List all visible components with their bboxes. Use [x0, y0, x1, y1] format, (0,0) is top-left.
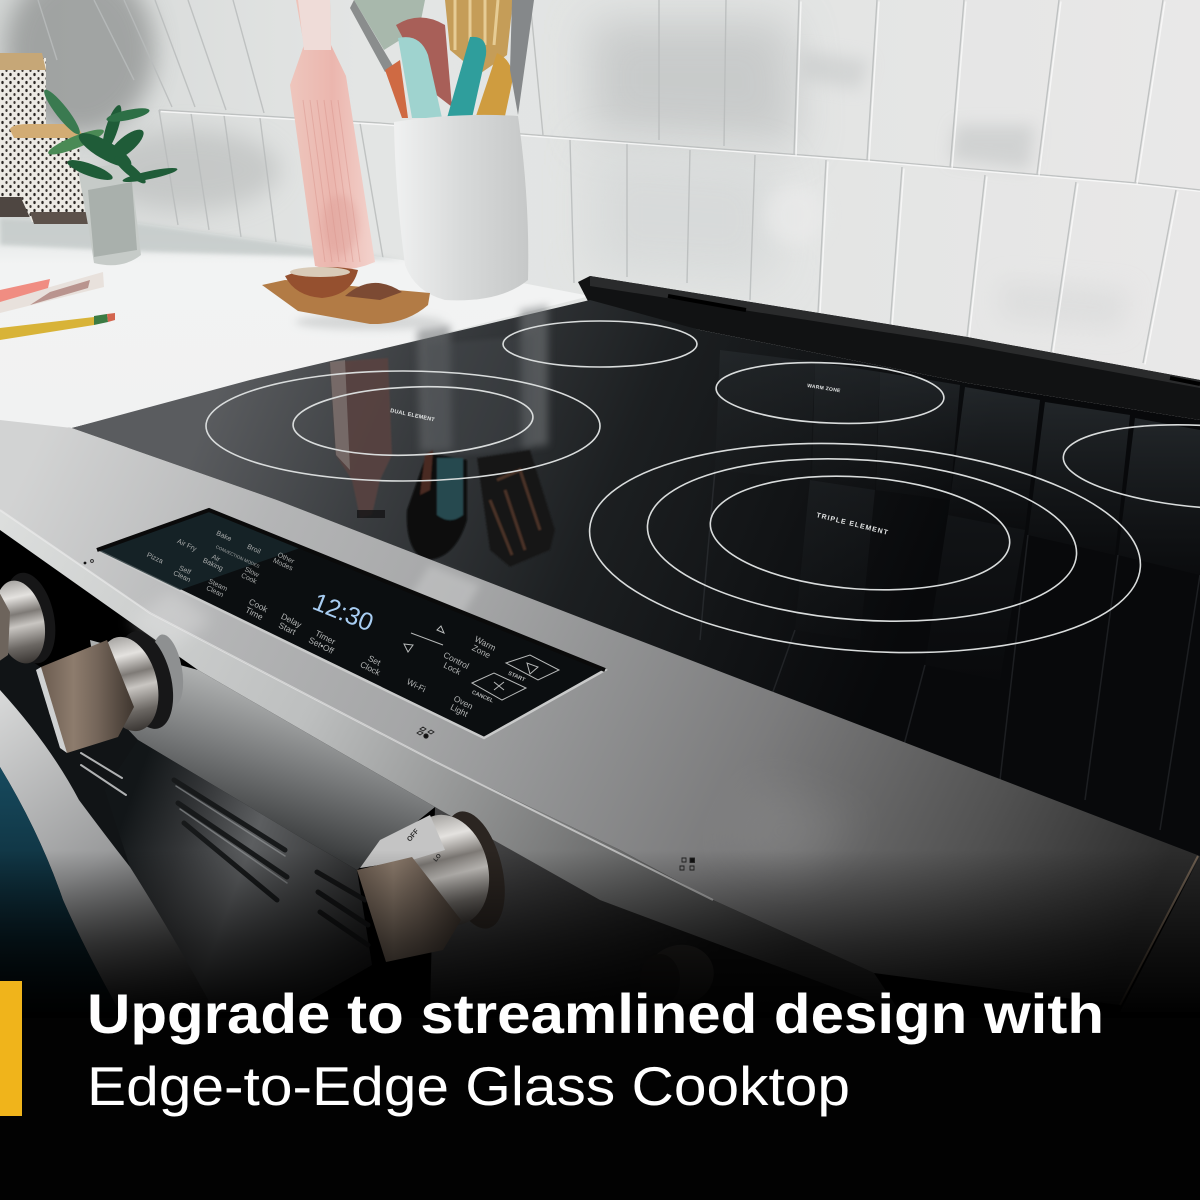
control panel: Set•Off	[307, 635, 336, 656]
black rear trim bar	[578, 276, 1200, 420]
right burner	[1060, 416, 1200, 518]
burner rings	[206, 321, 1200, 670]
panel labels: Air	[210, 554, 222, 564]
control panel: Light	[449, 702, 470, 719]
panel labels: Other	[276, 552, 296, 566]
lower faint knob	[640, 938, 720, 1012]
vent slots	[81, 753, 368, 945]
side of range	[1120, 856, 1200, 1012]
upper control face	[90, 640, 435, 870]
glass jar with plant	[40, 86, 178, 265]
stainless top surface	[0, 420, 1200, 1005]
panel labels: Clean	[205, 585, 225, 599]
center knob	[36, 625, 188, 753]
pad of paper and pencil	[0, 272, 115, 340]
triple element burner	[582, 426, 1148, 670]
panel labels: Self	[178, 565, 192, 576]
panel labels	[145, 530, 297, 600]
reflection of utensils	[407, 450, 555, 567]
glass cooktop	[72, 300, 1200, 860]
dark blue oven door	[0, 767, 120, 1012]
control panel: Timer	[314, 628, 337, 647]
start and cancel keys	[404, 626, 559, 700]
right knob labelled off	[357, 805, 516, 962]
dark area behind handle	[0, 640, 370, 1012]
reflection of bottle	[330, 358, 392, 518]
control panel: Time	[244, 605, 265, 622]
bottom dark gradient	[0, 850, 1200, 1020]
panel labels: Broil	[246, 544, 262, 556]
wooden tray with bowl	[262, 267, 445, 330]
right knob labelled off: LO	[433, 853, 443, 863]
stainless lip	[0, 505, 900, 1012]
control panel: Delay	[279, 611, 304, 630]
control panel	[97, 510, 605, 738]
burner labels: WARM ZONE	[807, 383, 841, 394]
dual element burner	[206, 371, 600, 481]
subheadline: Edge-to-Edge Glass Cooktop	[87, 1055, 850, 1117]
burner labels: TRIPLE ELEMENT	[816, 512, 889, 537]
model marker dots	[84, 560, 695, 870]
vent surface	[105, 740, 372, 1012]
control panel: Lock	[442, 660, 463, 677]
yellow accent bar	[0, 981, 22, 1116]
control panel: START	[507, 671, 526, 684]
clock display: 12:30	[309, 588, 377, 637]
panel labels: Steam	[207, 578, 228, 593]
warm zone	[715, 358, 945, 428]
burner labels: DUAL ELEMENT	[390, 408, 436, 423]
control panel: CANCEL	[471, 690, 495, 705]
burner labels	[390, 383, 889, 537]
panel labels: Baking	[201, 557, 224, 573]
panel labels: Cook	[240, 572, 258, 586]
control panel: Cook	[247, 596, 270, 615]
right knob labelled off: OFF	[406, 828, 421, 843]
lower control face right	[430, 807, 900, 1012]
countertop	[0, 218, 590, 428]
tiled wall	[0, 0, 1200, 420]
left knob	[0, 568, 63, 668]
control panel: Start	[277, 620, 298, 637]
panel labels: Bake	[215, 530, 232, 543]
control panel: Control	[442, 650, 471, 671]
panel labels: CONVECTION MODES	[215, 544, 260, 569]
control panel: Zone	[470, 642, 492, 660]
white utensil holder	[394, 115, 528, 300]
pink glass bottle	[290, 0, 375, 270]
caption band	[0, 1018, 1200, 1200]
control panel: Warm	[473, 634, 498, 653]
panel labels: Slow	[243, 566, 261, 579]
canisters with polka dots	[0, 53, 90, 224]
panel labels: Pizza	[145, 552, 164, 565]
control panel: Oven	[452, 693, 475, 712]
panel labels: Air Fry	[176, 538, 198, 553]
rear left burner	[503, 321, 697, 367]
panel labels: Modes	[272, 557, 294, 573]
panel labels: Clean	[172, 570, 192, 584]
control panel: Clock	[359, 659, 383, 678]
control panel: Set	[366, 653, 383, 668]
curved oven handle	[0, 690, 215, 1012]
control panel: Wi-Fi	[405, 676, 428, 694]
utensils	[350, 0, 534, 118]
headline: Upgrade to streamlined design with	[87, 982, 1104, 1045]
